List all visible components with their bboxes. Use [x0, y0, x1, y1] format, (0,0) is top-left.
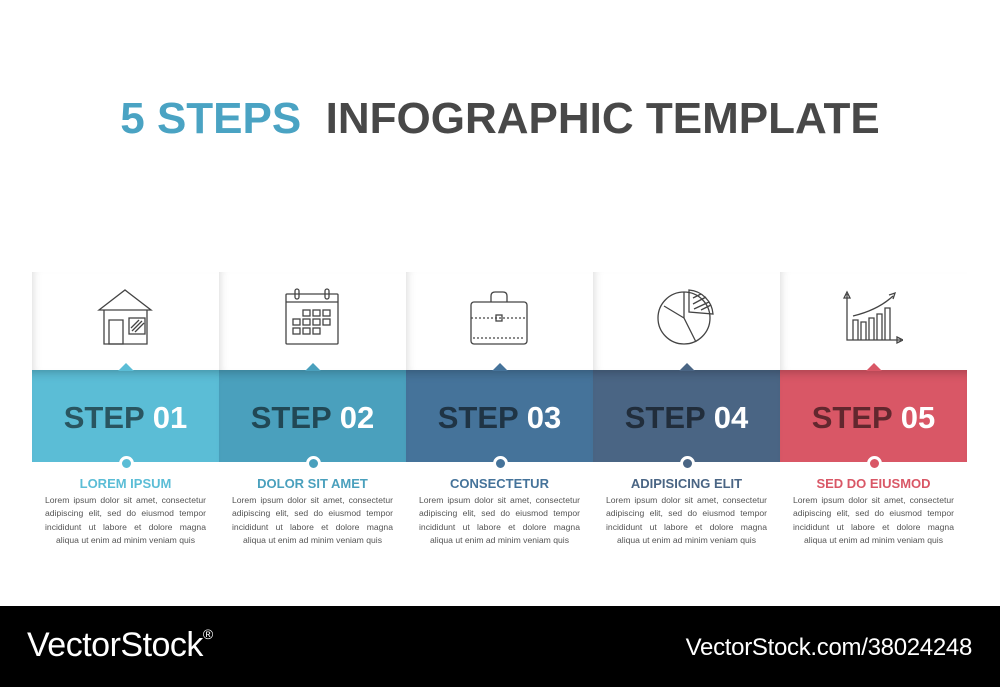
footer bar — [0, 606, 1000, 687]
heading: ADIPISICING ELIT — [631, 476, 742, 491]
heading: LOREM IPSUM — [80, 476, 171, 491]
icon: pie chart — [657, 289, 714, 345]
text: Lorem ipsum dolor sit amet, consectetur — [606, 495, 767, 505]
text: Lorem ipsum dolor sit amet, consectetur — [45, 495, 206, 505]
text: adipiscing elit, sed do eiusmod tempor — [606, 508, 767, 518]
text: aliqua ut enim ad minim veniam quis — [243, 535, 382, 545]
step label: STEP 02 — [251, 400, 374, 435]
text: adipiscing elit, sed do eiusmod tempor — [419, 508, 580, 518]
step label: STEP 04 — [625, 400, 748, 435]
text: aliqua ut enim ad minim veniam quis — [617, 535, 756, 545]
text — [606, 495, 768, 545]
panel: step 01 — [32, 272, 219, 545]
text: incididunt ut labore et dolore magna — [606, 522, 767, 532]
text — [45, 495, 206, 545]
heading: SED DO EIUSMOD — [816, 476, 931, 491]
text: adipiscing elit, sed do eiusmod tempor — [793, 508, 954, 518]
text: incididunt ut labore et dolore magna — [232, 522, 393, 532]
text: aliqua ut enim ad minim veniam quis — [56, 535, 195, 545]
footer url: VectorStock.com/38024248 — [686, 634, 972, 661]
text: incididunt ut labore et dolore magna — [419, 522, 580, 532]
text: aliqua ut enim ad minim veniam quis — [804, 535, 943, 545]
text — [793, 495, 954, 545]
footer logo: VectorStock® — [27, 626, 213, 664]
icon: calendar — [285, 288, 339, 345]
text — [232, 495, 394, 545]
heading: CONSECTETUR — [450, 476, 549, 491]
text: adipiscing elit, sed do eiusmod tempor — [232, 508, 393, 518]
panel: step 03 — [406, 272, 593, 545]
step label: STEP 05 — [812, 400, 935, 435]
step label: STEP 03 — [438, 400, 561, 435]
icon: briefcase — [470, 291, 528, 345]
heading: DOLOR SIT AMET — [257, 476, 368, 491]
step label: STEP 01 — [64, 400, 187, 435]
text: incididunt ut labore et dolore magna — [793, 522, 954, 532]
panel: step 02 — [219, 272, 406, 545]
title: 5 STEPS INFOGRAPHIC TEMPLATE — [120, 94, 880, 143]
text — [419, 495, 580, 545]
text: adipiscing elit, sed do eiusmod tempor — [45, 508, 206, 518]
text: Lorem ipsum dolor sit amet, consectetur — [793, 495, 954, 505]
text: aliqua ut enim ad minim veniam quis — [430, 535, 569, 545]
icon: growth chart — [843, 290, 903, 344]
text: Lorem ipsum dolor sit amet, consectetur — [419, 495, 580, 505]
panel: step 04 — [593, 272, 780, 545]
text: incididunt ut labore et dolore magna — [45, 522, 206, 532]
text: Lorem ipsum dolor sit amet, consectetur — [232, 495, 393, 505]
icon: house — [97, 289, 153, 345]
panel: step 05 — [780, 272, 967, 545]
